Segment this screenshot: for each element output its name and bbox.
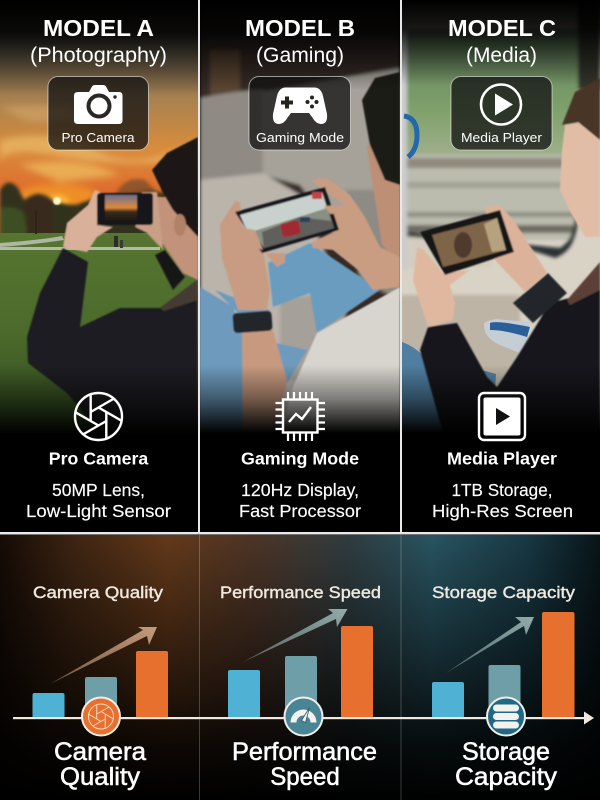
icon: camera quality badge (82, 698, 120, 736)
heading: model C: MODEL C (448, 15, 556, 41)
model C fades (402, 0, 600, 443)
badge: pro camera: Pro Camera (62, 130, 135, 145)
panel: comparison chart background (0, 535, 600, 800)
chart: camera quality (32, 584, 168, 718)
panel: model B gaming (200, 34, 400, 431)
axis arrow (13, 712, 594, 724)
feature: gaming mode: 120Hz Display, (241, 480, 359, 500)
feature: pro camera: Pro Camera (49, 448, 149, 468)
feature: gaming mode (239, 392, 361, 521)
heading: model B: (Gaming) (256, 44, 344, 67)
heading: model B (245, 15, 355, 67)
woman with phone (413, 78, 600, 433)
model B fades (200, 0, 400, 436)
man with phone (27, 137, 198, 433)
feature: media player: Media Player (447, 448, 557, 468)
heading: model C: (Media) (466, 44, 537, 67)
badge: pro camera (48, 76, 148, 150)
feature: pro camera (26, 392, 171, 521)
label: capacity: Capacity (455, 763, 558, 791)
heading: model A (30, 15, 167, 67)
man with game phone (200, 72, 400, 433)
heading: model B: MODEL B (245, 15, 355, 41)
feature: pro camera: Low-Light Sensor (26, 501, 171, 521)
panel: model C media (402, 9, 600, 430)
icon: speed gauge badge (284, 698, 322, 736)
chart: performance speed (220, 584, 381, 718)
heading: model C (448, 15, 556, 67)
label: performance: Performance (232, 738, 377, 766)
chart: storage capacity (432, 584, 576, 718)
arrow: camera trend (50, 627, 157, 684)
icon: play circle (481, 84, 521, 124)
feature: pro camera: 50MP Lens, (52, 480, 145, 500)
chart: performance speed: Performance Speed (220, 584, 381, 602)
chart: storage capacity: Storage Capacity (432, 584, 576, 602)
feature: gaming mode: Fast Processor (239, 501, 361, 521)
photo: train window (400, 0, 600, 440)
feature: media player (432, 393, 573, 521)
icon: camera (74, 85, 122, 124)
photo: sofa (200, 0, 400, 433)
photo: sunset park (0, 0, 198, 433)
icon: storage database badge (487, 698, 525, 736)
label: speed: Speed (270, 763, 340, 791)
panel: model A photography (0, 26, 198, 428)
badge: media player: Media Player (461, 130, 543, 145)
badge: gaming mode: Gaming Mode (256, 130, 344, 145)
badge: media player (451, 76, 552, 150)
label: camera: Camera (54, 738, 146, 766)
heading: model A: (Photography) (30, 44, 167, 67)
heading: model A: MODEL A (43, 15, 154, 41)
feature: media player: 1TB Storage, (452, 480, 552, 500)
label: quality: Quality (60, 763, 141, 791)
arrow: storage trend (446, 617, 534, 673)
badge: gaming mode (249, 76, 350, 150)
icon: aperture (75, 392, 122, 441)
feature: gaming mode: Gaming Mode (241, 448, 359, 468)
dividers (0, 0, 600, 534)
icon: play square (479, 393, 525, 440)
icon: gamepad (273, 88, 327, 124)
model A fades (0, 0, 198, 434)
feature: media player: High-Res Screen (432, 501, 573, 521)
arrow: performance trend (243, 609, 348, 662)
label: storage: Storage (462, 738, 550, 766)
icon: chip with chart (276, 392, 325, 441)
chart: camera quality: Camera Quality (33, 584, 164, 602)
